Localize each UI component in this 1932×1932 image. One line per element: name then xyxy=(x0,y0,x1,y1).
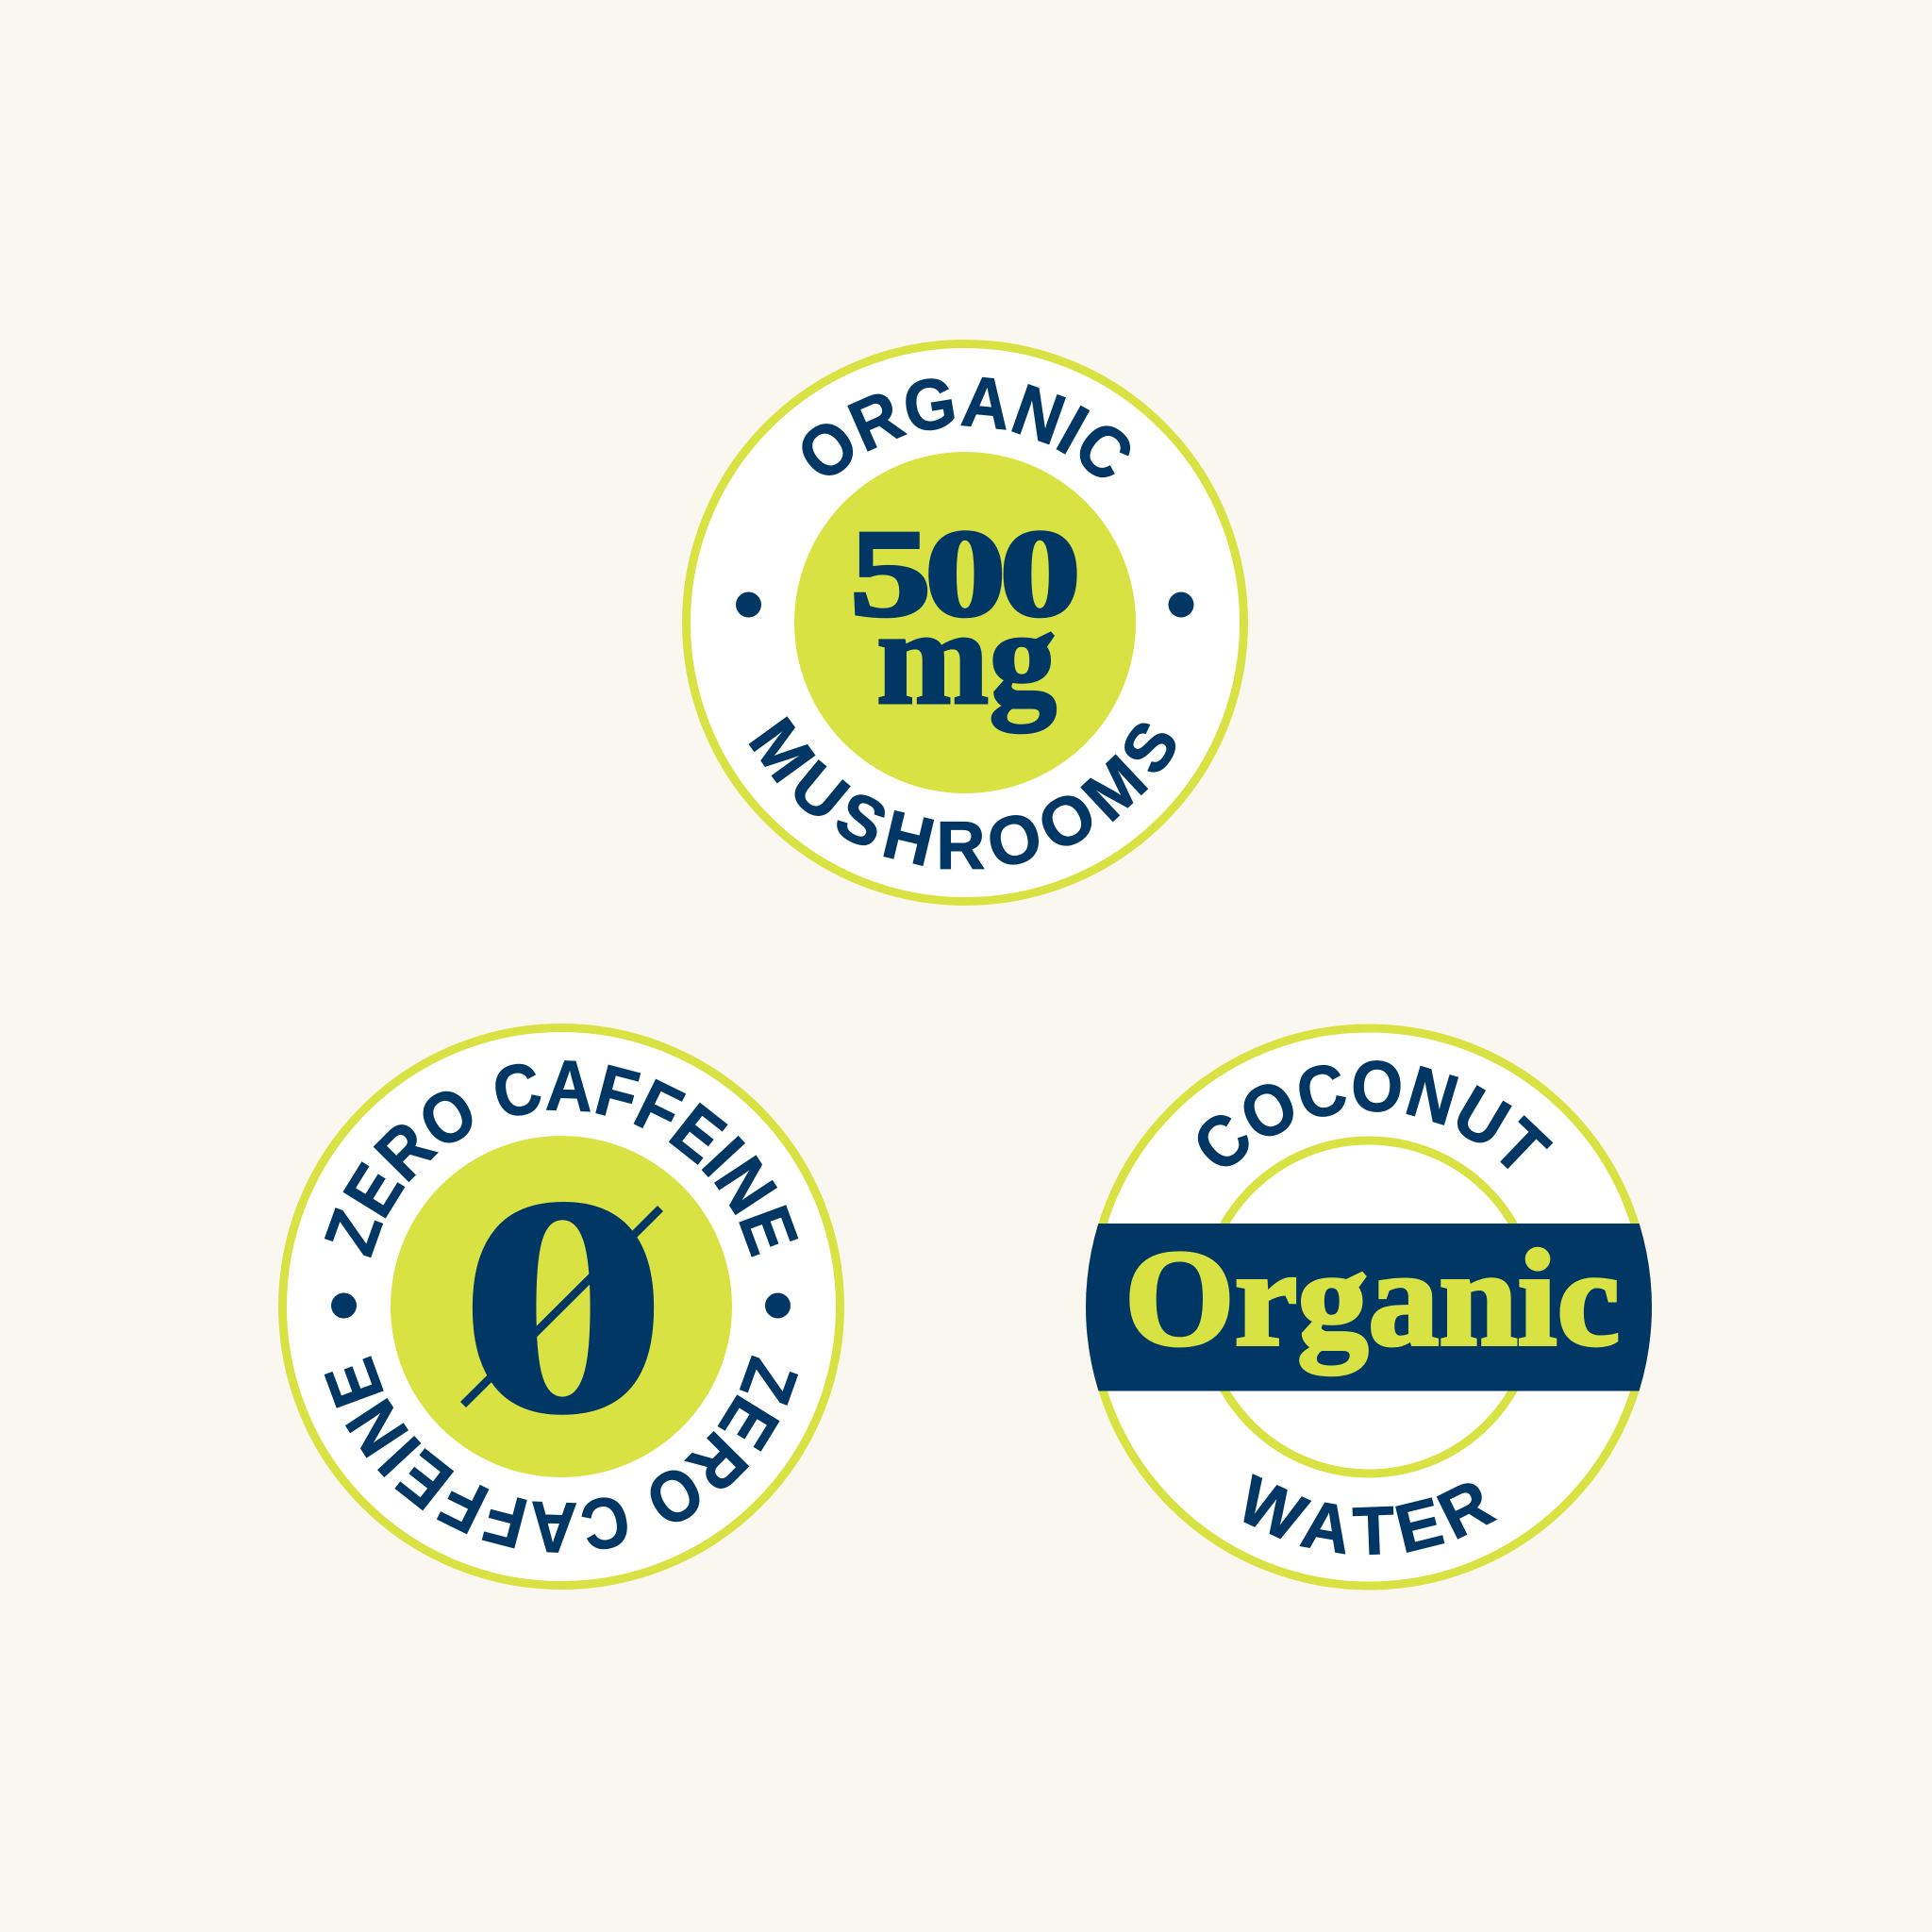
badge outer ring xyxy=(687,343,1243,902)
curved text: coconut: COCONUT xyxy=(1198,1060,1553,1170)
dot right xyxy=(1168,592,1194,617)
badge: zero caffeine xyxy=(278,1024,844,1590)
curved text: water: WATER xyxy=(1243,1474,1498,1555)
dot left xyxy=(736,592,761,617)
dot right xyxy=(765,1292,791,1319)
badge outer ring xyxy=(283,1028,840,1585)
number: 500: 500 xyxy=(850,504,1074,642)
badge inner ring xyxy=(1202,1141,1536,1474)
badge: organic coconut water xyxy=(1086,1024,1652,1591)
curved text: zero caffeine top: ZERO CAFFEINE xyxy=(325,1060,798,1258)
unit: mg: mg xyxy=(876,583,1057,733)
badge: 500 mg organic mushrooms xyxy=(682,340,1248,906)
navy banner xyxy=(1086,1224,1652,1391)
dot left xyxy=(331,1292,357,1319)
curved text: organic: ORGANIC xyxy=(802,377,1130,477)
banner word: organic: Organic xyxy=(1124,1222,1620,1374)
badge inner disc xyxy=(794,452,1136,793)
numeral: slashed zero: 0 xyxy=(458,1134,668,1478)
badge inner disc xyxy=(391,1136,732,1477)
badge outer ring xyxy=(1091,1028,1647,1586)
curved text: mushrooms: MUSHROOMS xyxy=(749,716,1175,870)
curved text: zero caffeine bottom: ZERO CAFFEINE xyxy=(325,1355,798,1553)
